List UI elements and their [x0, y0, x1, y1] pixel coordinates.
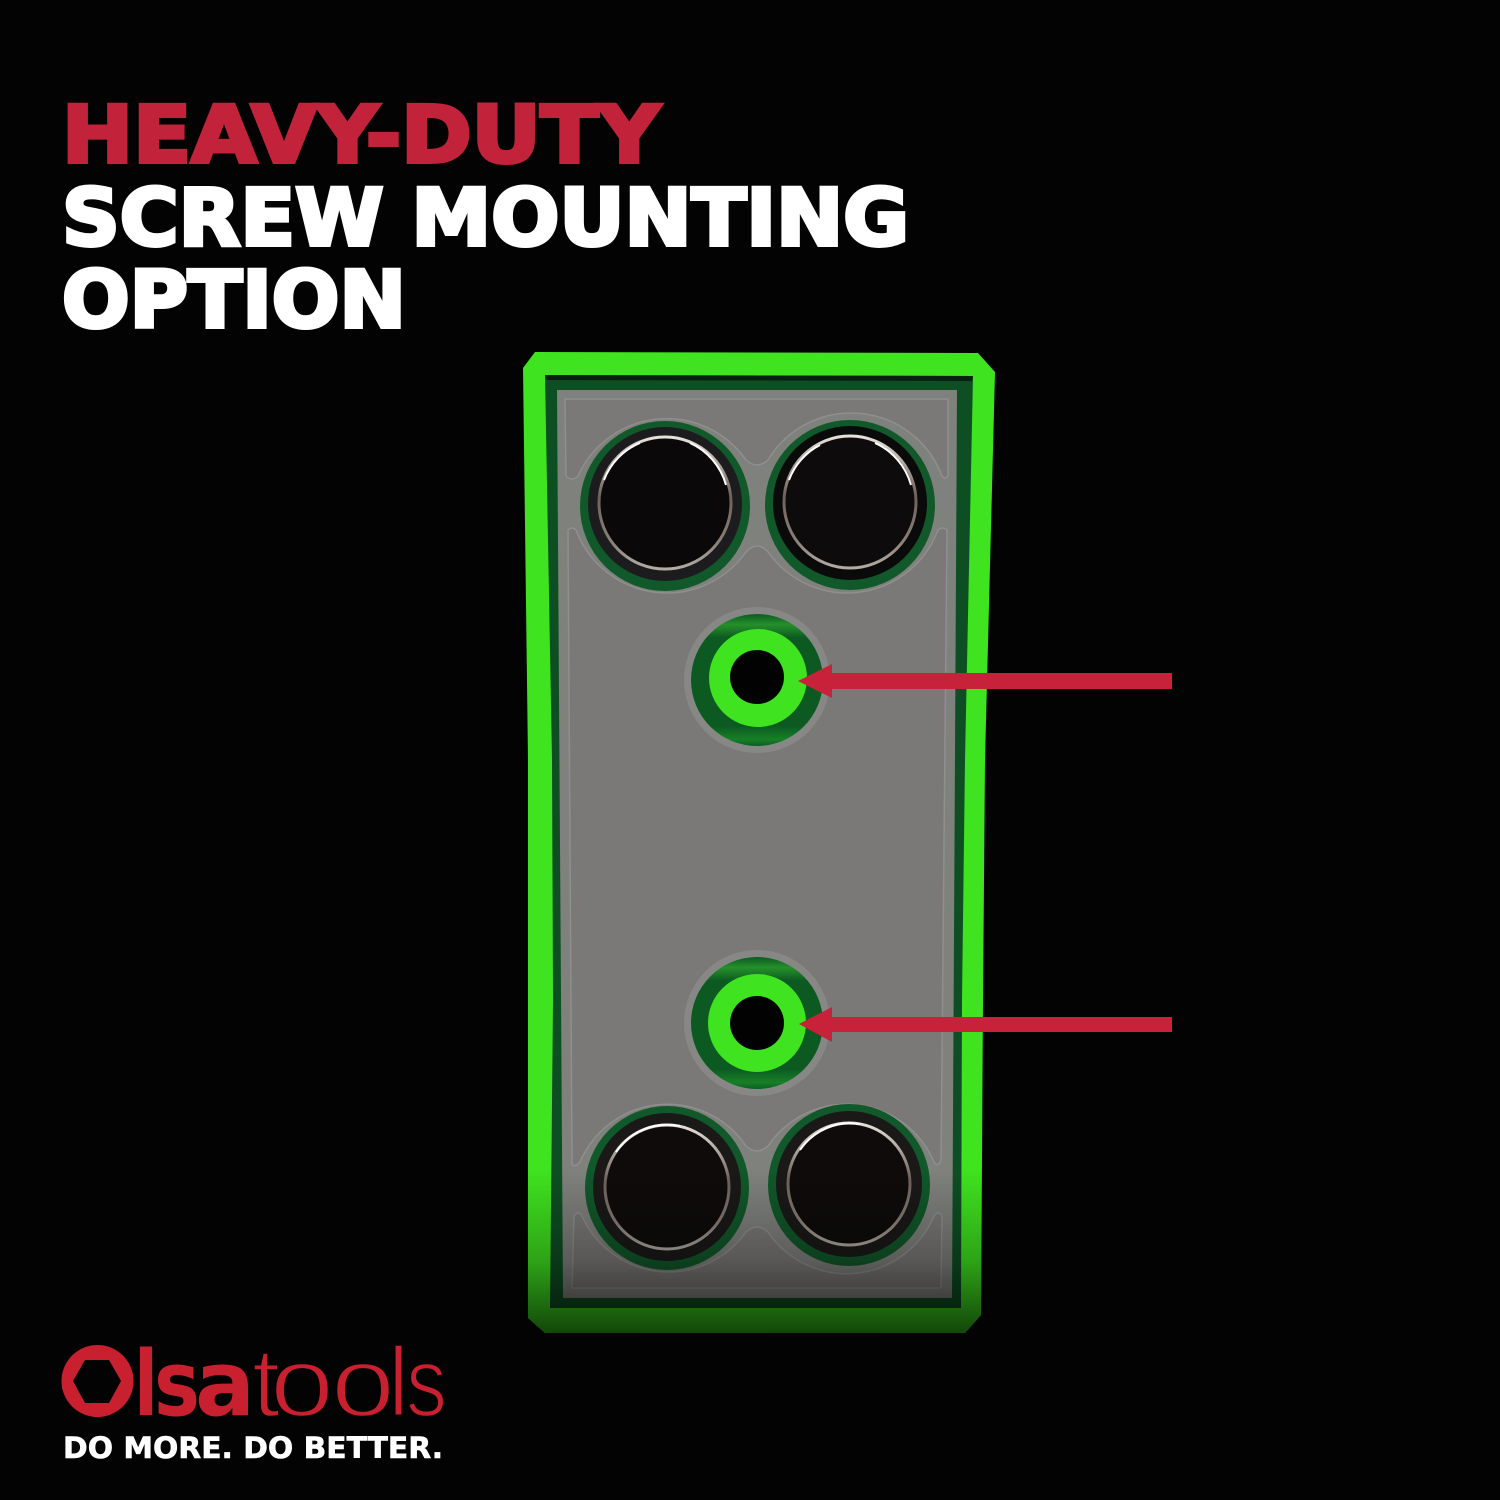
- logo icon: hexagon O: [62, 1345, 134, 1417]
- bottom shadow fade: [528, 1182, 982, 1333]
- heading line: screw mounting: SCREW MOUNTING: [62, 174, 909, 264]
- dark green recess: [545, 375, 973, 1308]
- logo wordmark: tools: s: [406, 1327, 447, 1437]
- magnet: top right: [765, 420, 935, 590]
- logo wordmark: tools: [252, 1327, 447, 1437]
- logo wordmark: tools: l: [388, 1327, 409, 1437]
- middle panel: [568, 528, 947, 1166]
- tagline: DO MORE. DO BETTER.: [63, 1431, 443, 1465]
- logo wordmark: tools: o: [270, 1327, 334, 1437]
- logo wordmark: lsa: l: [134, 1332, 158, 1437]
- logo wordmark: lsa: a: [195, 1332, 255, 1437]
- infographic canvas: [62, 102, 1172, 1459]
- arrow: bottom screw hole: [799, 1007, 1172, 1042]
- recess top shadow: [545, 375, 973, 381]
- arrow: top screw hole: [798, 664, 1172, 698]
- heading line: heavy-duty: HEAVY-DUTY: [62, 91, 662, 181]
- logo: [62, 1327, 447, 1465]
- screw hole: top: [684, 607, 830, 753]
- heading line: option: OPTION: [62, 256, 406, 346]
- magnet: bottom left: [585, 1106, 749, 1270]
- title: [62, 91, 909, 346]
- top panel: [565, 399, 948, 479]
- logo wordmark: lsa: s: [154, 1332, 200, 1437]
- logo wordmark: tools: o: [331, 1327, 395, 1437]
- product: magnetic mount plate: [520, 352, 1000, 1335]
- bottom panel: [572, 1213, 942, 1288]
- logo wordmark: lsa: [134, 1332, 255, 1437]
- grey plate: [557, 390, 957, 1298]
- magnet: top left: [580, 421, 750, 591]
- raised plate panels: [565, 399, 948, 1288]
- screw hole: bottom: [684, 950, 830, 1096]
- magnet: bottom right: [768, 1104, 930, 1266]
- green outer frame: [523, 352, 995, 1333]
- logo wordmark: tools: t: [252, 1327, 280, 1437]
